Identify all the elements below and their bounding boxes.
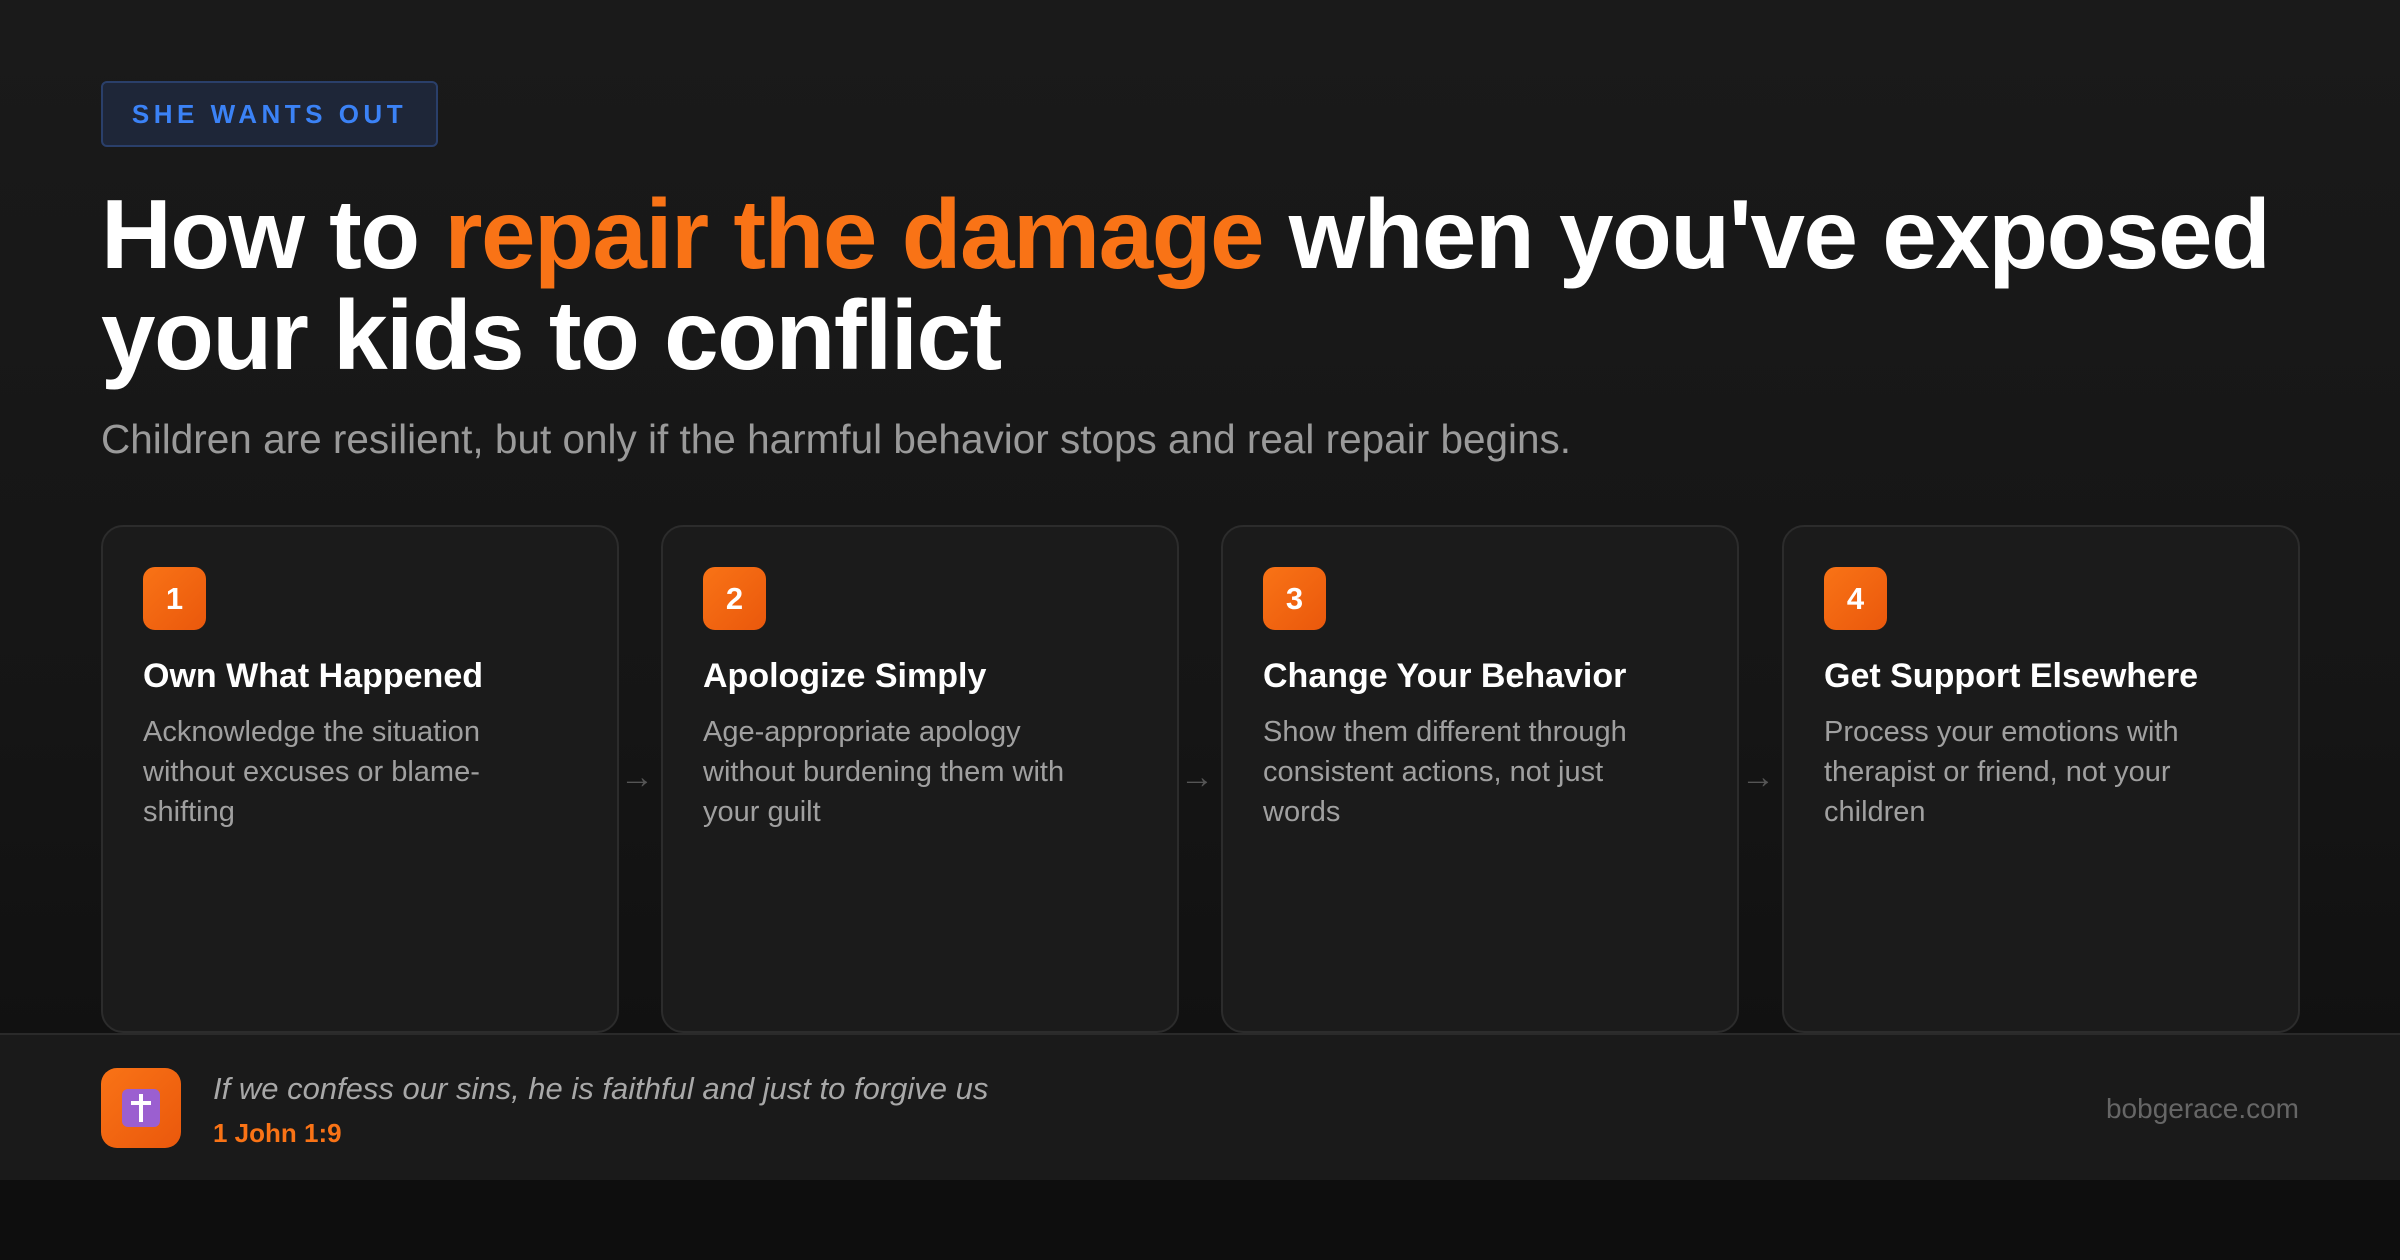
footer band (0, 1033, 2400, 1180)
card 2 (661, 525, 1179, 1033)
desc 2 (703, 716, 1064, 828)
heading 3: Change Your Behavior (1263, 657, 1626, 695)
desc 2: without burdening them with your guilt (703, 756, 1064, 828)
arrow 3: → (1741, 758, 1775, 796)
desc 3: Show them different through consistent actions, not just words (1263, 716, 1627, 828)
arrow 1: → (620, 758, 654, 796)
heading 2: Apologize Simply (703, 657, 986, 695)
number 1: 1 (166, 581, 183, 616)
icon: cross (101, 1068, 181, 1148)
number 3: 3 (1286, 581, 1303, 616)
number 4: 4 (1847, 581, 1864, 616)
number 4 (1824, 567, 1887, 630)
desc 4: Process your emotions with therapist or friend, not your children (1824, 716, 2179, 828)
number 2: 2 (726, 581, 743, 616)
quote: If we confess our sins, he is faithful and just to forgive us (213, 1071, 988, 1106)
arrow 2: → (1180, 758, 1214, 796)
number 1 (143, 567, 206, 630)
number 3 (1263, 567, 1326, 630)
badge (101, 81, 438, 147)
card 4 (1782, 525, 2300, 1033)
reference: 1 John 1:9 (213, 1118, 342, 1148)
desc 1: Acknowledge the situation without excuses or blame-shifting (143, 716, 480, 828)
number 2 (703, 567, 766, 630)
subtitle: Children are resilient, but only if the harmful behavior stops and real repair begins. (101, 416, 1571, 462)
heading 1: Own What Happened (143, 657, 483, 695)
badge: SHE WANTS OUT (132, 99, 407, 129)
card 3 (1221, 525, 1739, 1033)
title: How to repair the damage when you've exposed your kids to conflict (101, 179, 2269, 390)
heading 4: Get Support Elsewhere (1824, 657, 2198, 695)
desc 2: Age-appropriate apology (703, 716, 1021, 748)
card 1 (101, 525, 619, 1033)
site: bobgerace.com (2106, 1093, 2299, 1124)
